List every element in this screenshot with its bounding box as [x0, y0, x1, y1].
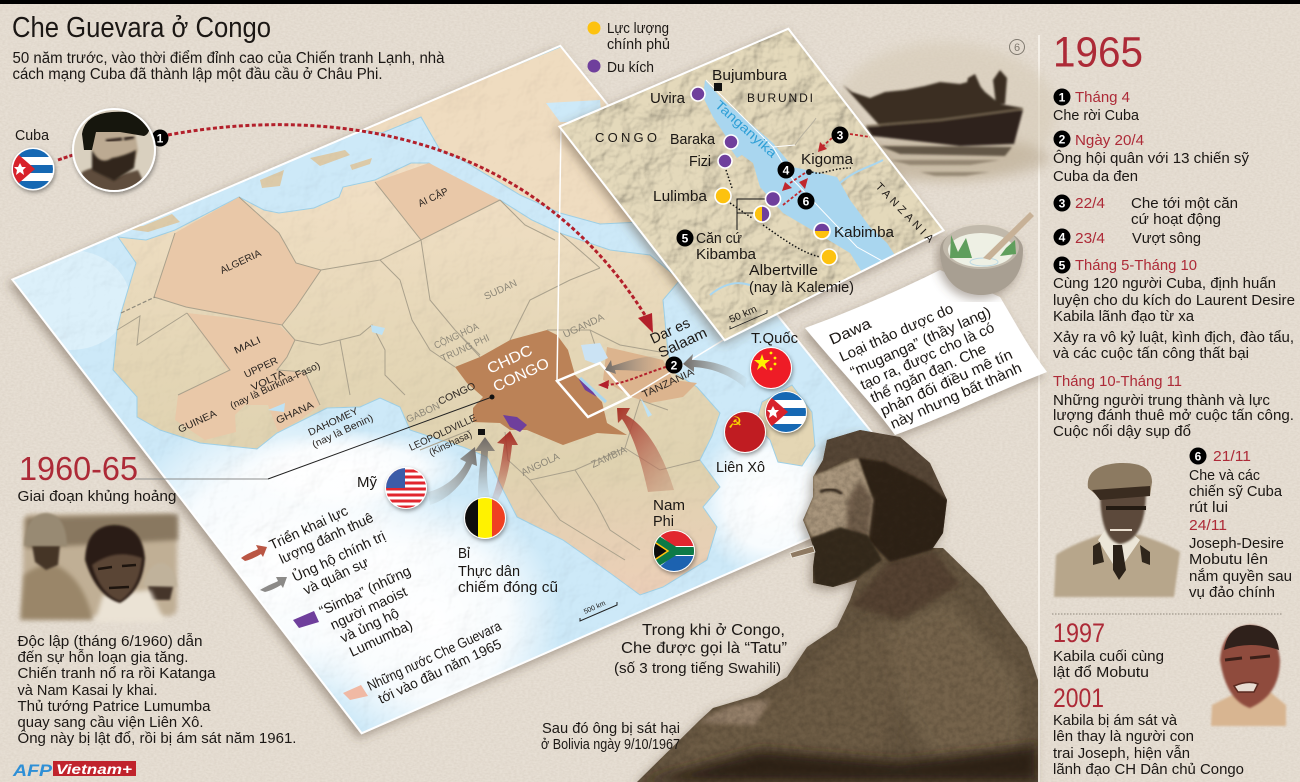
- note: Dawa paper: phản đối điều mê tín: [878, 347, 1015, 420]
- text: Mobutu coup: vụ đảo chính: [1189, 585, 1275, 601]
- beret: [815, 430, 947, 500]
- timeline 1965: [1053, 88, 1295, 440]
- inset labels: Albertville: [749, 263, 818, 279]
- caption Bolivia: ở Bolivia ngày 9/10/1967: [541, 737, 680, 753]
- map legend: Những nước Che Guevara: [365, 617, 504, 694]
- step badges on map: 3: [837, 128, 844, 142]
- legend: government and guerrilla dots: Du kích: [607, 60, 654, 76]
- legend: government and guerrilla dots: Lực lượng: [607, 21, 669, 37]
- map labels: CỘNG HÒA: [432, 320, 481, 352]
- crisis description text: Ông này bị lật đổ, rồi bị ám sát năm 1961.: [18, 730, 296, 747]
- white frame linking inset and map: [557, 127, 725, 417]
- panel: inset map Lake Tanganyika: [555, 25, 950, 345]
- text: Mobutu coup: 6: [1195, 450, 1202, 464]
- Tanzania: [603, 347, 697, 403]
- flag: Belgium: [464, 497, 507, 539]
- flag: South Africa: [653, 530, 695, 572]
- hair: [858, 458, 948, 562]
- crisis description text: đến sự hỗn loạn gia tăng.: [18, 649, 188, 666]
- text: 1997 and 2001: lật đổ Mobutu: [1053, 665, 1149, 681]
- subheading crisis period: Giai đoạn khủng hoảng: [18, 489, 176, 505]
- scale bar 500 km: [580, 600, 617, 621]
- face: [804, 458, 873, 538]
- map labels: VOLTA: [250, 368, 287, 394]
- label Belgium: chiếm đóng cũ: [458, 580, 558, 596]
- map labels: (nay là Burkina-Faso): [229, 360, 322, 412]
- inset labels: Tanganyika: [712, 97, 781, 161]
- caption Bolivia: [541, 721, 680, 753]
- map labels: GUINEA: [177, 408, 219, 436]
- intro text: cách mạng Cuba đã thành lập một đầu cầu ở Châu Phi.: [12, 66, 382, 83]
- label Mỹ: Mỹ: [357, 475, 378, 491]
- inset labels: Baraka: [670, 132, 716, 148]
- photo: soldiers on a boat: [833, 42, 1057, 182]
- heading 1965: 1965: [1053, 28, 1143, 76]
- note: Dawa paper: thể ngăn đạn. Che: [868, 341, 989, 407]
- inset labels: TANZANIA: [873, 181, 936, 246]
- panel: Africa map: [0, 40, 930, 750]
- map labels: ANGOLA: [520, 451, 562, 479]
- inset labels: Uvira: [650, 91, 686, 107]
- legend: government and guerrilla dots: [588, 21, 670, 76]
- note: Dawa paper: tạo ra, được cho là có: [858, 320, 997, 394]
- map legend: và quân sự: [301, 554, 371, 598]
- label Belgium: Bỉ: [458, 546, 471, 562]
- top black bar: [0, 0, 1300, 4]
- left soldier: [20, 565, 93, 620]
- arrows: political and military support: [428, 354, 747, 505]
- timeline 1965: 3: [1059, 196, 1066, 210]
- Simba zones: [503, 415, 527, 432]
- timeline 1965: Tháng 5-Tháng 10: [1075, 258, 1197, 274]
- map labels: CHDC: [485, 342, 535, 378]
- map labels: [177, 184, 710, 479]
- label Soviet Union: Liên Xô: [716, 460, 765, 476]
- timeline 1965: Che rời Cuba: [1053, 108, 1140, 124]
- flag: USSR: [724, 411, 766, 453]
- intro text: 50 năm trước, vào thời điểm đỉnh cao của Chiến tranh Lạnh, nhà: [12, 50, 445, 67]
- column divider: [1038, 35, 1040, 782]
- logo: AFP Vietnam+: AFP: [12, 761, 53, 780]
- timeline 1965: cứ hoạt động: [1131, 212, 1221, 228]
- flag: China: [750, 347, 792, 389]
- text: 1997 and 2001: trai Joseph, hiện vẫn: [1053, 745, 1190, 762]
- map labels: GABON: [405, 401, 442, 426]
- caption Tatu: [614, 622, 787, 677]
- map legend: tới vào đầu năm 1965: [376, 636, 504, 707]
- timeline 1965: 2: [1059, 132, 1066, 146]
- label South Africa: Nam: [653, 498, 685, 514]
- text: Mobutu coup: nắm quyền sau: [1189, 568, 1292, 585]
- text: Mobutu coup: Mobutu lên: [1189, 552, 1268, 568]
- text: Mobutu coup: 24/11: [1189, 518, 1227, 534]
- map labels: DAHOMEY: [307, 406, 361, 439]
- text: 1997 and 2001: 2001: [1053, 683, 1104, 713]
- arrows: mercenaries: [492, 408, 674, 500]
- map legend: lượng đánh thuê: [277, 509, 376, 567]
- crowd of soldiers: [843, 80, 1023, 126]
- timeline 1965: 23/4: [1075, 231, 1105, 247]
- timeline 1965: Vượt sông: [1132, 231, 1201, 247]
- timeline 1965: Cùng 120 người Cuba, định huấn: [1053, 276, 1276, 292]
- cigar: [790, 546, 815, 558]
- text: 1997 and 2001: lãnh đạo CH Dân chủ Congo: [1053, 762, 1244, 778]
- label Belgium: [458, 546, 558, 596]
- inset labels: [595, 68, 936, 296]
- timeline 1965: 22/4: [1075, 196, 1105, 212]
- flag: USA: [385, 467, 427, 509]
- label Belgium: Thực dân: [458, 564, 520, 580]
- text: 1997 and 2001: Kabila cuối cùng: [1053, 649, 1164, 665]
- label South Africa: [653, 498, 685, 530]
- right soldier: [148, 583, 174, 600]
- logo: AFP Vietnam+: [12, 761, 136, 780]
- crisis leader line: [135, 394, 494, 479]
- map labels: AI CẬP: [416, 184, 451, 210]
- inset labels: Bujumbura: [712, 68, 788, 84]
- photo: Mobutu: [1054, 463, 1180, 597]
- step badges on map: 1: [157, 132, 164, 146]
- photo: Lumumba and soldiers: [20, 513, 178, 622]
- text: Mobutu coup: chiến sỹ Cuba: [1189, 484, 1283, 500]
- step badges on map: 4: [783, 164, 790, 178]
- photo: Che Guevara smoking: [600, 420, 1040, 782]
- relief: [60, 80, 850, 707]
- map legend: Ủng hộ chính trị: [289, 527, 388, 585]
- map labels: LEOPOLDVILLE: [408, 413, 479, 454]
- route 1 dashed arc Cuba to Dar es Salaam: [58, 125, 653, 333]
- inset labels: Fizi: [689, 154, 711, 170]
- map labels: TRUNG PHI: [440, 333, 491, 365]
- timeline 1965: Cuộc nổi dậy sụp đổ: [1053, 424, 1191, 440]
- map labels: ALGERIA: [219, 248, 263, 277]
- timeline 1965: lượng đánh thuê mở cuộc tấn công.: [1053, 408, 1294, 424]
- coat shading: [887, 604, 1020, 756]
- caption Bolivia: Sau đó ông bị sát hại: [542, 721, 680, 737]
- timeline 1965: Tháng 4: [1075, 90, 1130, 106]
- inset labels: BURUNDI: [747, 91, 813, 105]
- map legend: Triển khai lực: [267, 502, 350, 553]
- land: Arabia and Europe: [366, 47, 632, 224]
- text: 1997 and 2001: 1997: [1053, 618, 1105, 648]
- map legend: Lumumba): [347, 616, 415, 660]
- text: Mobutu coup: 21/11: [1213, 449, 1251, 465]
- crisis description text: Chiến tranh nổ ra rồi Katanga: [18, 666, 216, 682]
- text: 1997 and 2001: Kabila bị ám sát và: [1053, 713, 1178, 729]
- map labels: ZAMBIA: [590, 445, 629, 471]
- boat hull: [866, 110, 1023, 146]
- red dashed route 2: [598, 367, 666, 389]
- text: 1997 and 2001: [1053, 618, 1244, 778]
- caption Tatu: Trong khi ở Congo,: [642, 622, 785, 639]
- land: Africa: [113, 163, 720, 595]
- Lumumba: [95, 590, 165, 622]
- map labels: Salaam: [656, 325, 710, 362]
- map labels: SUDAN: [483, 278, 519, 303]
- text: 1997 and 2001: lên thay là người con: [1053, 729, 1194, 745]
- timeline 1965: 4: [1059, 230, 1066, 244]
- note: Dawa paper: Loại thảo dược do: [837, 301, 956, 366]
- water reflections: [880, 146, 1012, 156]
- sea: [14, 118, 870, 732]
- note: Dawa paper: Dawa: [827, 315, 875, 349]
- inset labels: Lulimba: [653, 189, 708, 205]
- map labels: UGANDA: [562, 312, 606, 341]
- timeline 1965: Ông hội quân với 13 chiến sỹ: [1053, 150, 1250, 167]
- step badges on map: 5: [682, 232, 689, 246]
- text: Mobutu coup: [1189, 448, 1292, 601]
- highlighted countries: [154, 197, 321, 325]
- timeline 1965: Những người trung thành và lực: [1053, 393, 1270, 409]
- note: Dawa paper: này nhưng bất thành: [888, 360, 1024, 433]
- crisis description text: và Nam Kasai ly khai.: [18, 683, 158, 699]
- inset labels: CONGO: [595, 130, 657, 145]
- country borders: [117, 182, 700, 560]
- red dashed routes 3 4 6: [783, 134, 870, 205]
- timeline 1965: 1: [1059, 90, 1066, 104]
- inset scale bar: [728, 304, 767, 329]
- photo: Che Guevara portrait: [70, 105, 160, 195]
- step badges on map: [152, 126, 848, 374]
- label Cuba: Cuba: [15, 127, 50, 144]
- legend: government and guerrilla dots: chính phủ: [607, 37, 670, 53]
- Kibamba bracket: [737, 199, 767, 230]
- map legend: và ủng hộ: [338, 605, 402, 646]
- map legend: [241, 502, 504, 707]
- timeline 1965: Che tới một căn: [1131, 196, 1238, 212]
- timeline 1965: và các cuộc tấn công thất bại: [1053, 346, 1249, 362]
- DR Congo: [455, 330, 627, 445]
- label South Africa: Phi: [653, 514, 674, 530]
- map labels: Dar es: [648, 315, 693, 348]
- timeline 1965: Cuba da đen: [1053, 169, 1138, 185]
- flag: Cuba origin: [12, 148, 54, 190]
- timeline 1965: Xảy ra vô kỷ luật, kình địch, đào tẩu,: [1053, 330, 1294, 346]
- icon: mortar and pestle: [940, 212, 1034, 295]
- text: Mobutu coup: rút lui: [1189, 500, 1228, 516]
- map labels: MALI: [233, 335, 263, 357]
- photo reference number 6: [1010, 40, 1024, 54]
- map labels: CONGO: [491, 355, 552, 396]
- heading 1960-65: 1960-65: [19, 450, 138, 487]
- timeline 1965: luyện cho du kích do Laurent Desire: [1053, 293, 1295, 309]
- step badges on map: 6: [803, 194, 810, 208]
- step badges on map: 2: [671, 358, 678, 372]
- text: Mobutu coup: Joseph-Desire: [1189, 536, 1284, 552]
- scale bar 500 km: 500 km: [583, 600, 607, 616]
- note: Dawa paper: [805, 270, 1047, 435]
- lakes: [581, 343, 608, 364]
- timeline 1965: 5: [1059, 258, 1066, 272]
- map labels: TANZANIA: [641, 367, 696, 401]
- crisis description text: Thủ tướng Patrice Lumumba: [18, 699, 211, 715]
- land: Madagascar: [755, 385, 815, 466]
- inset scale bar: 50 km: [728, 304, 759, 326]
- crisis description text: quay sang cầu viện Liên Xô.: [18, 715, 204, 731]
- map labels: GHANA: [275, 400, 316, 427]
- location dots: [691, 87, 837, 265]
- intro text: [12, 50, 445, 83]
- timeline 1965: Ngày 20/4: [1075, 133, 1144, 149]
- map legend: người maoist: [328, 583, 410, 633]
- title: Che Guevara ở Congo: [12, 12, 271, 44]
- lake Tanganyika: [703, 80, 900, 280]
- map labels: CONGO: [437, 381, 478, 408]
- crisis description text: Độc lập (tháng 6/1960) dẫn: [18, 633, 202, 650]
- text: Mobutu coup: Che và các: [1189, 468, 1260, 484]
- note: Dawa paper: “muganga” (thầy lang): [848, 304, 993, 381]
- standing soldiers: [965, 70, 1007, 104]
- inset labels: Căn cứ: [696, 231, 742, 247]
- map legend: “Simba” (những: [317, 562, 413, 619]
- route dotted lines: [726, 168, 851, 257]
- inset labels: Kibamba: [696, 247, 757, 263]
- map labels: (nay là Benin): [311, 413, 375, 451]
- flag: USSR: ☭: [728, 413, 742, 432]
- timeline 1965: Kabila lãnh đạo từ xa: [1053, 309, 1195, 325]
- logo: AFP Vietnam+: Vietnam+: [56, 761, 132, 777]
- caption Tatu: Che được gọi là “Tatu”: [621, 640, 787, 657]
- label China: T.Quốc: [751, 331, 798, 347]
- crisis description text: [18, 633, 296, 747]
- inset labels: (nay là Kalemie): [749, 280, 854, 296]
- caption Tatu: (số 3 trong tiếng Swahili): [614, 661, 781, 677]
- map labels: (Kinshasa): [428, 429, 474, 459]
- map labels: UPPER: [243, 356, 280, 381]
- photo: Kabila: [1211, 625, 1286, 726]
- inset labels: Kigoma: [801, 152, 854, 168]
- flag: Cuba on map: [765, 391, 807, 433]
- beard: [811, 527, 882, 588]
- inset labels: Kabimba: [834, 225, 895, 241]
- timeline 1965: Tháng 10-Tháng 11: [1053, 374, 1182, 390]
- photo reference number 6: 6: [1014, 42, 1020, 54]
- lake Tanganyika on map: [580, 378, 606, 402]
